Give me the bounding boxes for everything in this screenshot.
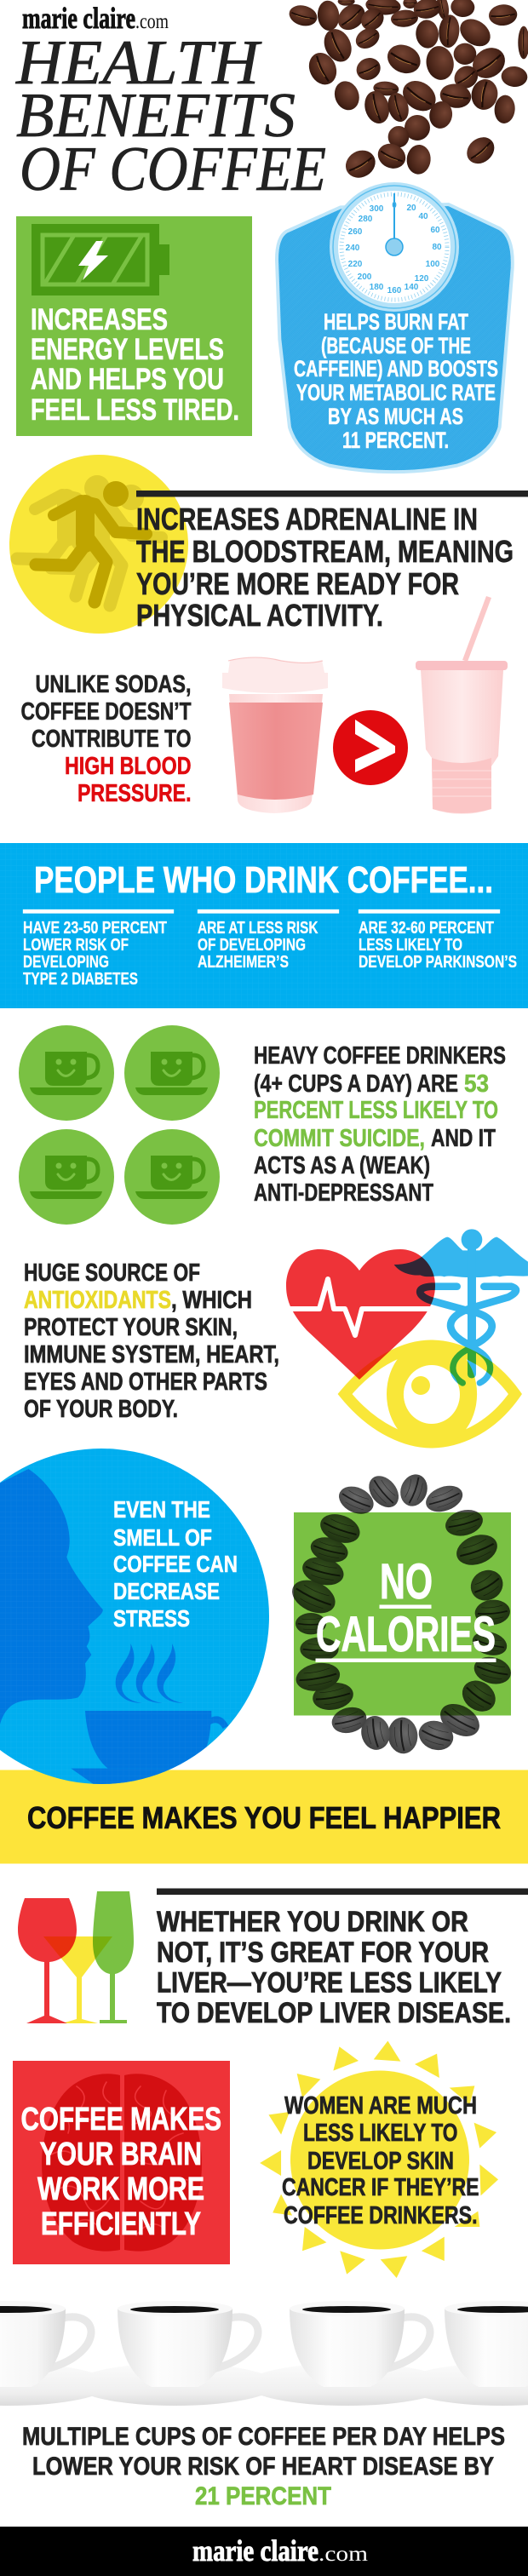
antioxidants text: PROTECT YOUR SKIN,	[24, 1314, 238, 1341]
sun text	[282, 2092, 479, 2229]
heavy coffee drinkers text: (4+ CUPS A DAY) ARE	[254, 1070, 458, 1098]
column: alzheimers: OF DEVELOPING	[198, 936, 306, 955]
column: diabetes: LOWER RISK OF	[23, 936, 129, 955]
panel: energy levels	[16, 216, 252, 436]
footer: marie claire	[192, 2534, 319, 2567]
icon: eye	[345, 1340, 515, 1448]
column: alzheimers: ARE AT LESS RISK	[198, 919, 319, 938]
panel: adrenaline	[9, 455, 528, 634]
stress text: STRESS	[113, 1605, 190, 1632]
coffee to-go cup	[222, 657, 328, 813]
row of coffee cups	[0, 2301, 528, 2406]
sun text: CANCER IF THEY’RE	[282, 2174, 479, 2201]
coffee beans photo	[287, 0, 528, 183]
adrenaline text: PHYSICAL ACTIVITY.	[136, 598, 383, 633]
rule	[136, 491, 528, 497]
antioxidants text: EYES AND OTHER PARTS	[24, 1368, 267, 1396]
column: diabetes: DEVELOPING	[23, 953, 109, 972]
heavy coffee drinkers text: ACTS AS A (WEAK)	[254, 1152, 430, 1179]
title: HEALTH	[15, 28, 262, 98]
energy text: FEEL LESS TIRED.	[31, 393, 239, 427]
blood pressure text	[20, 671, 192, 807]
brain text: COFFEE MAKES	[20, 2102, 221, 2137]
antioxidants text: ANTIOXIDANTS	[24, 1287, 171, 1314]
title: BENEFITS	[16, 81, 296, 151]
scale text: (BECAUSE OF THE	[321, 333, 471, 359]
brain text: EFFICIENTLY	[41, 2206, 201, 2242]
energy text: ENERGY LEVELS	[31, 333, 224, 366]
yellow band: coffee makes you feel happier	[0, 1770, 528, 1863]
icon: heart with ecg	[286, 1249, 435, 1380]
icon: sun	[260, 2041, 498, 2278]
scale dial: 40	[418, 212, 428, 221]
panel: people who drink coffee	[0, 843, 528, 1008]
scale dial: 20	[406, 204, 416, 213]
scale dial: 240	[346, 244, 360, 253]
scale dial: 180	[370, 283, 384, 292]
adrenaline text	[136, 502, 514, 633]
column: diabetes: HAVE 23-50 PERCENT	[23, 919, 167, 938]
antioxidants text	[24, 1259, 279, 1423]
scale dial: 280	[359, 215, 373, 224]
scale text: 11 PERCENT.	[342, 427, 449, 453]
icon: caduceus	[394, 1229, 528, 1383]
footer	[0, 2527, 528, 2576]
marie claire logo: marie claire	[22, 2, 135, 35]
marie claire logo: .com	[135, 10, 169, 33]
greater-than badge	[333, 710, 408, 785]
stress text: DECREASE	[113, 1578, 220, 1604]
heavy coffee drinkers text	[254, 1042, 506, 1207]
rule	[157, 1889, 528, 1895]
stress text: COFFEE CAN	[113, 1551, 238, 1577]
column: parkinsons: LESS LIKELY TO	[359, 936, 462, 955]
antioxidants text: , WHICH	[171, 1287, 252, 1314]
panel: sun skin cancer	[260, 2041, 498, 2278]
yellow circle	[9, 455, 188, 634]
scale text	[294, 309, 498, 453]
scale text: BY AS MUCH AS	[328, 404, 463, 429]
soda cup	[416, 596, 508, 814]
sun text: COFFEE DRINKERS.	[284, 2202, 477, 2229]
brain text: WORK MORE	[37, 2172, 204, 2207]
green square	[294, 1512, 511, 1715]
profile, steam and cup	[0, 1469, 228, 1788]
panel: smell of coffee	[0, 1448, 528, 1863]
scale dial: 220	[348, 260, 363, 269]
stress text: SMELL OF	[113, 1524, 212, 1551]
antioxidants text: OF YOUR BODY.	[24, 1396, 178, 1423]
scale dial: 260	[348, 227, 363, 237]
blood pressure text: HIGH BLOOD	[65, 753, 191, 780]
brain text	[20, 2102, 221, 2242]
scale dial: 300	[370, 204, 384, 214]
icon: battery	[32, 224, 169, 295]
panel: scale burn fat	[277, 182, 513, 472]
no calories text: NO	[380, 1554, 433, 1609]
scale dial: 120	[415, 274, 429, 284]
column: parkinsons: ARE 32-60 PERCENT	[359, 919, 494, 938]
scale dial: 140	[405, 283, 419, 292]
liver text: WHETHER YOU DRINK OR	[157, 1906, 468, 1938]
panel: brain	[13, 2061, 230, 2264]
title: OF COFFEE	[20, 135, 326, 204]
blue circle	[0, 1449, 269, 1784]
column: diabetes: TYPE 2 DIABETES	[23, 970, 138, 989]
antioxidants text: HUGE SOURCE OF	[24, 1259, 200, 1287]
sun text: LESS LIKELY TO	[303, 2120, 458, 2147]
title	[15, 28, 326, 204]
scale dial: 200	[358, 273, 372, 282]
liver text	[157, 1906, 511, 2029]
scale dial: 100	[426, 260, 440, 269]
icons: four happy cups	[19, 1025, 220, 1225]
stress text: EVEN THE	[113, 1496, 210, 1523]
column: alzheimers: ALZHEIMER’S	[198, 953, 289, 972]
scale dial: 0	[392, 201, 397, 210]
energy text: INCREASES	[31, 303, 168, 336]
sun text: WOMEN ARE MUCH	[284, 2092, 477, 2120]
panel: high blood pressure	[20, 596, 508, 814]
blood pressure text: COFFEE DOESN’T	[20, 698, 192, 726]
heart disease text	[22, 2423, 505, 2510]
energy text	[31, 303, 239, 427]
bean ring	[287, 1470, 514, 1755]
heavy coffee drinkers text: AND IT	[431, 1125, 496, 1152]
scale dial: 160	[387, 286, 402, 295]
footer: .com	[319, 2543, 369, 2566]
heavy coffee drinkers text: COMMIT SUICIDE,	[254, 1125, 425, 1152]
no calories text	[316, 1554, 496, 1662]
icon: wine glasses	[18, 1891, 134, 2023]
heavy coffee drinkers text: 53	[464, 1070, 489, 1098]
blood pressure text: CONTRIBUTE TO	[32, 726, 191, 753]
heart disease text: 21 PERCENT	[195, 2482, 331, 2510]
sun text: DEVELOP SKIN	[307, 2148, 454, 2175]
scale text: HELPS BURN FAT	[324, 309, 468, 335]
antioxidants text: IMMUNE SYSTEM, HEART,	[24, 1341, 279, 1368]
stress text	[113, 1496, 238, 1632]
energy text: AND HELPS YOU	[31, 363, 224, 396]
scale body	[277, 204, 513, 472]
column: diabetes	[23, 909, 174, 989]
scale dial	[330, 182, 459, 312]
heavy coffee drinkers text: ANTI-DEPRESSANT	[254, 1179, 433, 1207]
column: alzheimers	[198, 909, 339, 972]
blood pressure text: PRESSURE.	[77, 780, 191, 807]
brain text: YOUR BRAIN	[40, 2137, 202, 2172]
blood pressure text: UNLIKE SODAS,	[36, 671, 191, 698]
icon: running figure	[17, 475, 162, 605]
scale dial: 80	[432, 243, 442, 252]
icon: brain	[42, 2074, 202, 2252]
panel: no calories	[287, 1470, 514, 1755]
column: parkinsons	[359, 909, 517, 972]
scale dial: 60	[430, 226, 440, 235]
